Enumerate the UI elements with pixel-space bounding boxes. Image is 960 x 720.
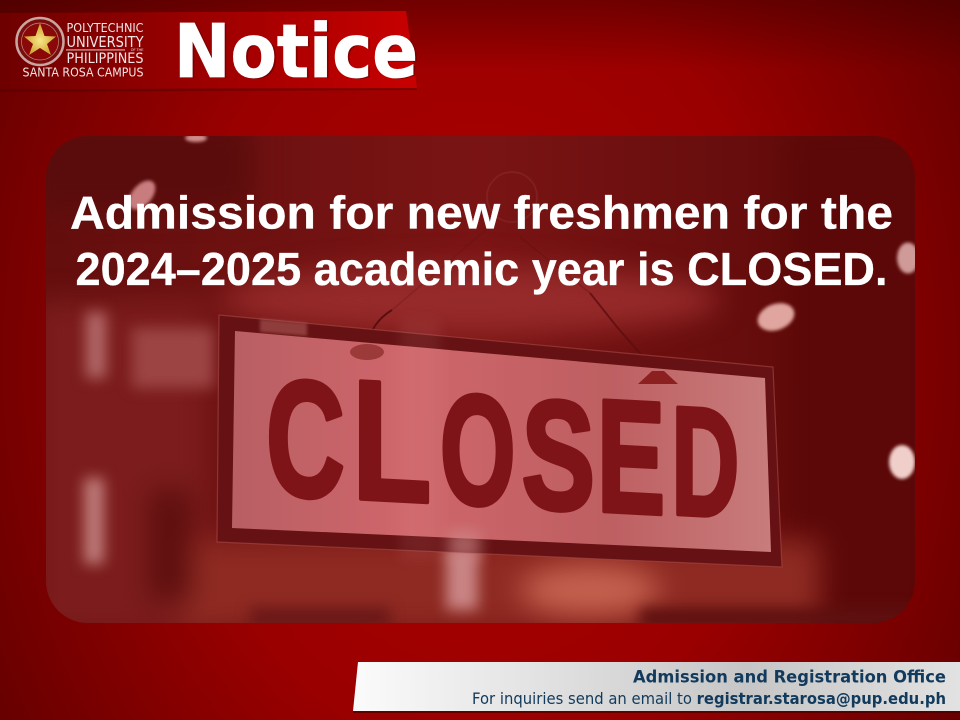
headline bbox=[70, 186, 893, 295]
bokeh lights bbox=[123, 134, 919, 479]
blurred background glow bbox=[46, 136, 830, 623]
footer bar bbox=[353, 662, 960, 713]
university name: PHILIPPINES bbox=[66, 51, 144, 67]
sign lettering: S bbox=[522, 368, 595, 544]
sign lettering: L bbox=[352, 345, 431, 539]
university name: POLYTECHNIC bbox=[66, 20, 144, 35]
suction cups bbox=[350, 344, 384, 360]
sign lettering: C bbox=[266, 344, 345, 534]
headline: 2024–2025 academic year is CLOSED. bbox=[76, 243, 888, 295]
header band bbox=[0, 11, 417, 92]
notice heading: Notice bbox=[176, 10, 420, 96]
sign lettering bbox=[268, 378, 737, 518]
panel: closed sign photo bbox=[30, 120, 930, 640]
inquiry line: For inquiries send an email to registrar.starosa@pup.edu.ph bbox=[472, 689, 946, 708]
sign lettering: D bbox=[671, 375, 739, 551]
soft reflections bbox=[84, 312, 920, 628]
university name bbox=[22, 20, 144, 80]
hanger wire bbox=[372, 172, 642, 354]
office name: Admission and Registration Office bbox=[633, 668, 946, 688]
sign lettering: O bbox=[440, 360, 515, 540]
notice heading: Notice bbox=[174, 9, 418, 95]
university name: UNIVERSITY bbox=[66, 33, 144, 51]
reflections on board bbox=[260, 319, 307, 336]
sign board bbox=[217, 315, 782, 567]
sign lettering: E bbox=[597, 366, 665, 549]
headline: Admission for new freshmen for the bbox=[70, 186, 893, 238]
university name: OF THE bbox=[131, 48, 144, 52]
logo seal bbox=[16, 18, 64, 65]
university name: SANTA ROSA CAMPUS bbox=[22, 66, 144, 80]
